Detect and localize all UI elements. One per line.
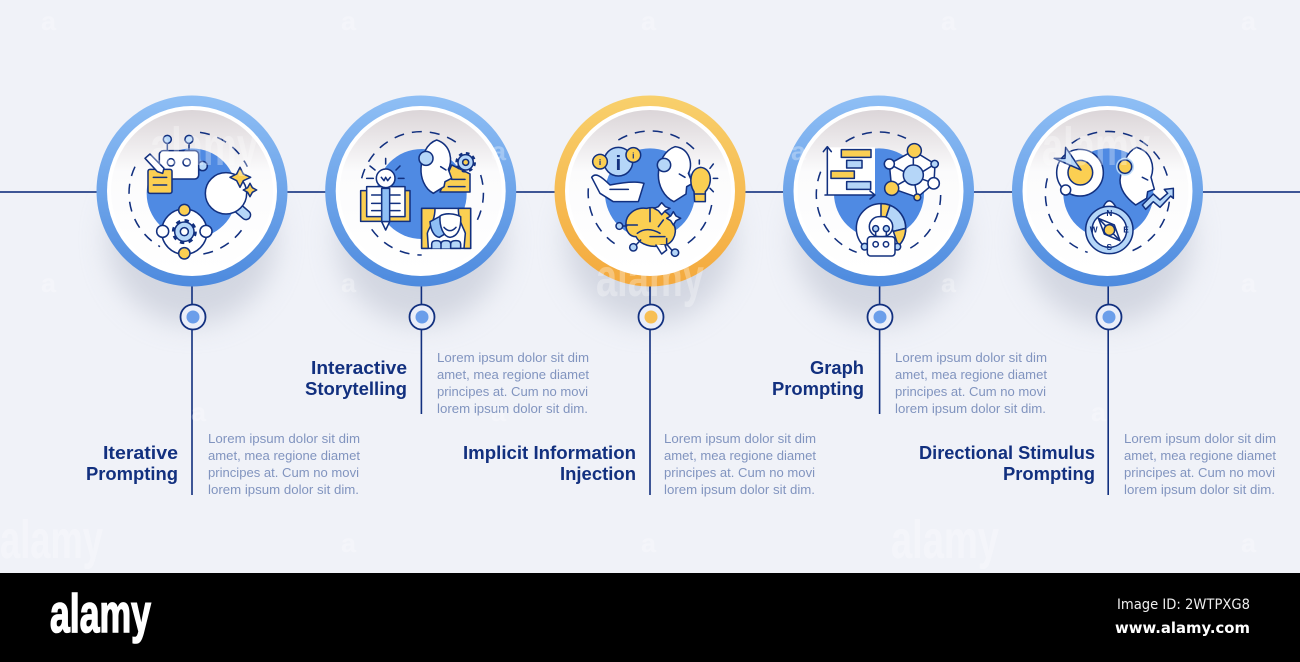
- body text 1: amet, mea regione diamet: [208, 448, 360, 463]
- body text 2: amet, mea regione diamet: [437, 367, 589, 382]
- watermarks: a: [491, 397, 507, 427]
- body text 4: lorem ipsum dolor sit dim.: [895, 401, 1046, 416]
- icon: target, AI head, trend arrow and compass: N: [1106, 208, 1112, 218]
- heading 2: Storytelling: [305, 379, 407, 399]
- body text 1: lorem ipsum dolor sit dim.: [208, 482, 359, 497]
- watermarks: a: [941, 6, 957, 36]
- footer bar: [0, 573, 1300, 662]
- icon: book with bulb, AI head and theatre masks: [361, 132, 483, 255]
- watermarks: a: [41, 6, 57, 36]
- node dot 5: [1096, 304, 1122, 330]
- body text 2: principes at. Cum no movi: [437, 384, 588, 399]
- body text 4: amet, mea regione diamet: [895, 367, 1047, 382]
- step 3: Implicit Information Injection: [463, 96, 816, 497]
- watermarks: a: [1091, 397, 1107, 427]
- body text 4: [895, 350, 1047, 416]
- watermarks: alamy: [1042, 117, 1150, 177]
- footer logo: alamy: [50, 584, 151, 644]
- circle badge 3: [554, 96, 746, 286]
- heading 1: Iterative: [103, 443, 178, 463]
- heading 5: Directional Stimulus: [919, 443, 1095, 463]
- body text 4: Lorem ipsum dolor sit dim: [895, 350, 1047, 365]
- body text 3: [664, 431, 816, 497]
- watermarks: a: [791, 136, 807, 166]
- watermarks: alamy: [596, 248, 704, 308]
- watermarks: a: [341, 6, 357, 36]
- body text 2: lorem ipsum dolor sit dim.: [437, 401, 588, 416]
- heading 1: Prompting: [86, 464, 178, 484]
- image id: Image ID: 2WTPXG8: [1117, 597, 1250, 613]
- icon: target, AI head, trend arrow and compass: [1045, 131, 1173, 254]
- watermarks: a: [491, 136, 507, 166]
- heading 3: Injection: [560, 464, 636, 484]
- circle badge 5: [1012, 96, 1203, 286]
- watermarks: a: [341, 268, 357, 298]
- watermarks: a: [341, 528, 357, 558]
- watermarks: alamy: [0, 510, 103, 570]
- watermarks: a: [1241, 6, 1257, 36]
- watermarks: a: [191, 397, 207, 427]
- node dot 3: [638, 304, 664, 330]
- heading 2: Interactive: [311, 358, 407, 378]
- watermarks: a: [941, 268, 957, 298]
- heading 3: Implicit Information: [463, 443, 636, 463]
- body text 5: principes at. Cum no movi: [1124, 465, 1275, 480]
- heading 5: [919, 443, 1095, 484]
- body text 5: Lorem ipsum dolor sit dim: [1124, 431, 1276, 446]
- node dot 4: [868, 304, 892, 330]
- icon: bar chart, network graph and robot pie: [816, 132, 941, 256]
- step 4: Graph Prompting: [772, 96, 1047, 416]
- heading 4: Graph: [810, 358, 864, 378]
- body text 1: Lorem ipsum dolor sit dim: [208, 431, 360, 446]
- body text 3: amet, mea regione diamet: [664, 448, 816, 463]
- circle badge 4: [783, 96, 974, 286]
- watermarks: alamy: [150, 117, 258, 177]
- circle badge 2: [325, 96, 516, 286]
- heading 3: [463, 443, 636, 484]
- node dot 2: [410, 304, 434, 330]
- icon: info hand, AI head, bulb and brain: i: [599, 157, 601, 167]
- watermarks: a: [1241, 528, 1257, 558]
- icon: info hand, AI head, bulb and brain: i: [615, 152, 621, 175]
- website: www.alamy.com: [1115, 619, 1250, 637]
- watermarks: alamy: [891, 510, 999, 570]
- body text 2: [437, 350, 589, 416]
- body text 3: principes at. Cum no movi: [664, 465, 815, 480]
- step 5: Directional Stimulus Prompting: [919, 96, 1276, 497]
- node dot 1: [180, 304, 206, 330]
- horizontal connector line: [0, 191, 1300, 193]
- watermarks: a: [41, 268, 57, 298]
- heading 4: Prompting: [772, 379, 864, 399]
- icon: target, AI head, trend arrow and compass: W: [1090, 225, 1098, 235]
- icon: target, AI head, trend arrow and compass: S: [1107, 242, 1113, 252]
- body text 1: principes at. Cum no movi: [208, 465, 359, 480]
- body text 1: [208, 431, 360, 497]
- heading 2: [305, 358, 407, 399]
- body text 3: lorem ipsum dolor sit dim.: [664, 482, 815, 497]
- watermarks: a: [1241, 268, 1257, 298]
- heading 1: [86, 443, 178, 484]
- circle badge 1: [96, 96, 288, 286]
- icon: info hand, AI head, bulb and brain: [588, 131, 718, 256]
- body text 5: [1124, 431, 1276, 497]
- step 1: Iterative Prompting: [86, 96, 360, 497]
- watermarks: a: [641, 528, 657, 558]
- body text 2: Lorem ipsum dolor sit dim: [437, 350, 589, 365]
- body text 3: Lorem ipsum dolor sit dim: [664, 431, 816, 446]
- watermarks: a: [641, 6, 657, 36]
- body text 5: amet, mea regione diamet: [1124, 448, 1276, 463]
- heading 4: [772, 358, 864, 399]
- icon: robot, note, magnifier and gear cycle: [129, 132, 257, 259]
- heading 5: Prompting: [1003, 464, 1095, 484]
- step 2: Interactive Storytelling: [305, 96, 589, 416]
- body text 5: lorem ipsum dolor sit dim.: [1124, 482, 1275, 497]
- icon: info hand, AI head, bulb and brain: i: [632, 150, 634, 160]
- icon: target, AI head, trend arrow and compass: E: [1123, 225, 1129, 235]
- body text 4: principes at. Cum no movi: [895, 384, 1046, 399]
